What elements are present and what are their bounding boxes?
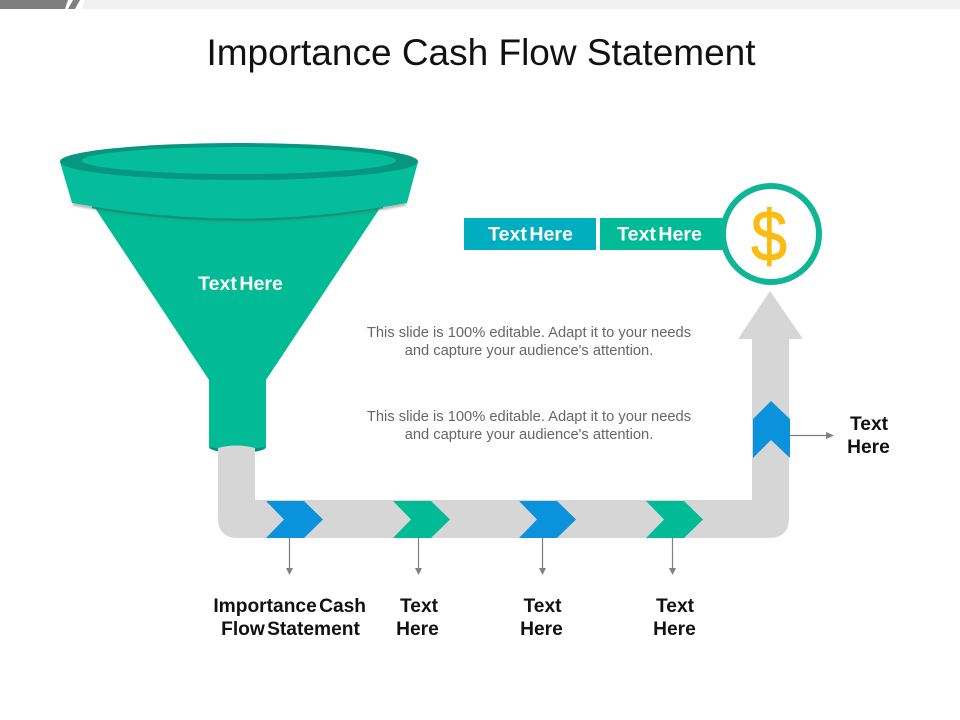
grey flow arrow pipe [218,291,803,538]
label: teal box: Text Here [488,224,573,246]
chevron: green 4 [646,501,703,538]
label: bottom 4: Text [656,596,695,617]
funnel rim band [60,162,418,218]
label: bottom 2: Text [400,596,439,617]
label: importance cash flow statement: Flow Statement [221,619,361,640]
arrow: down 2 [415,538,422,575]
title: Importance Cash Flow Statement [206,32,756,73]
funnel rim inner ellipse [82,147,396,174]
funnel band lower edge [92,207,383,220]
text block 2: and capture your audience's attention. [405,427,653,443]
label: importance cash flow statement: Importance Cash [213,596,366,617]
label: right: Text [850,414,889,435]
arrow: down 3 [539,538,546,575]
chevron: blue vertical [753,401,790,458]
text block 2: This slide is 100% editable. Adapt it to your needs [367,409,691,425]
arrow: down 1 [286,538,293,575]
funnel band shadow [73,204,406,220]
label: bottom 2: Here [396,619,439,640]
arrow: right [790,432,834,439]
arrow: down 4 [669,538,676,575]
chevron: blue 1 [266,501,323,538]
top decorative header bar [0,0,960,9]
icon: dollar coin [723,186,819,282]
funnel label: Text Here [198,273,283,295]
label: bottom 4: Here [653,619,696,640]
funnel cone and neck [93,205,382,449]
text block 1: and capture your audience's attention. [405,343,653,359]
text block 1: This slide is 100% editable. Adapt it to your needs [367,325,691,341]
chevron: blue 3 [519,501,576,538]
funnel rim outer ellipse [60,143,418,180]
label: teal box [464,218,596,250]
chevron: green 2 [393,501,450,538]
label: right: Here [847,437,890,458]
icon: funnel [60,143,418,453]
label: green box [600,218,725,250]
label: bottom 3: Text [523,596,562,617]
icon: dollar coin: $ [751,196,787,277]
label: green box: Text Here [617,224,702,246]
label: bottom 3: Here [520,619,563,640]
funnel neck base shade [209,441,266,453]
